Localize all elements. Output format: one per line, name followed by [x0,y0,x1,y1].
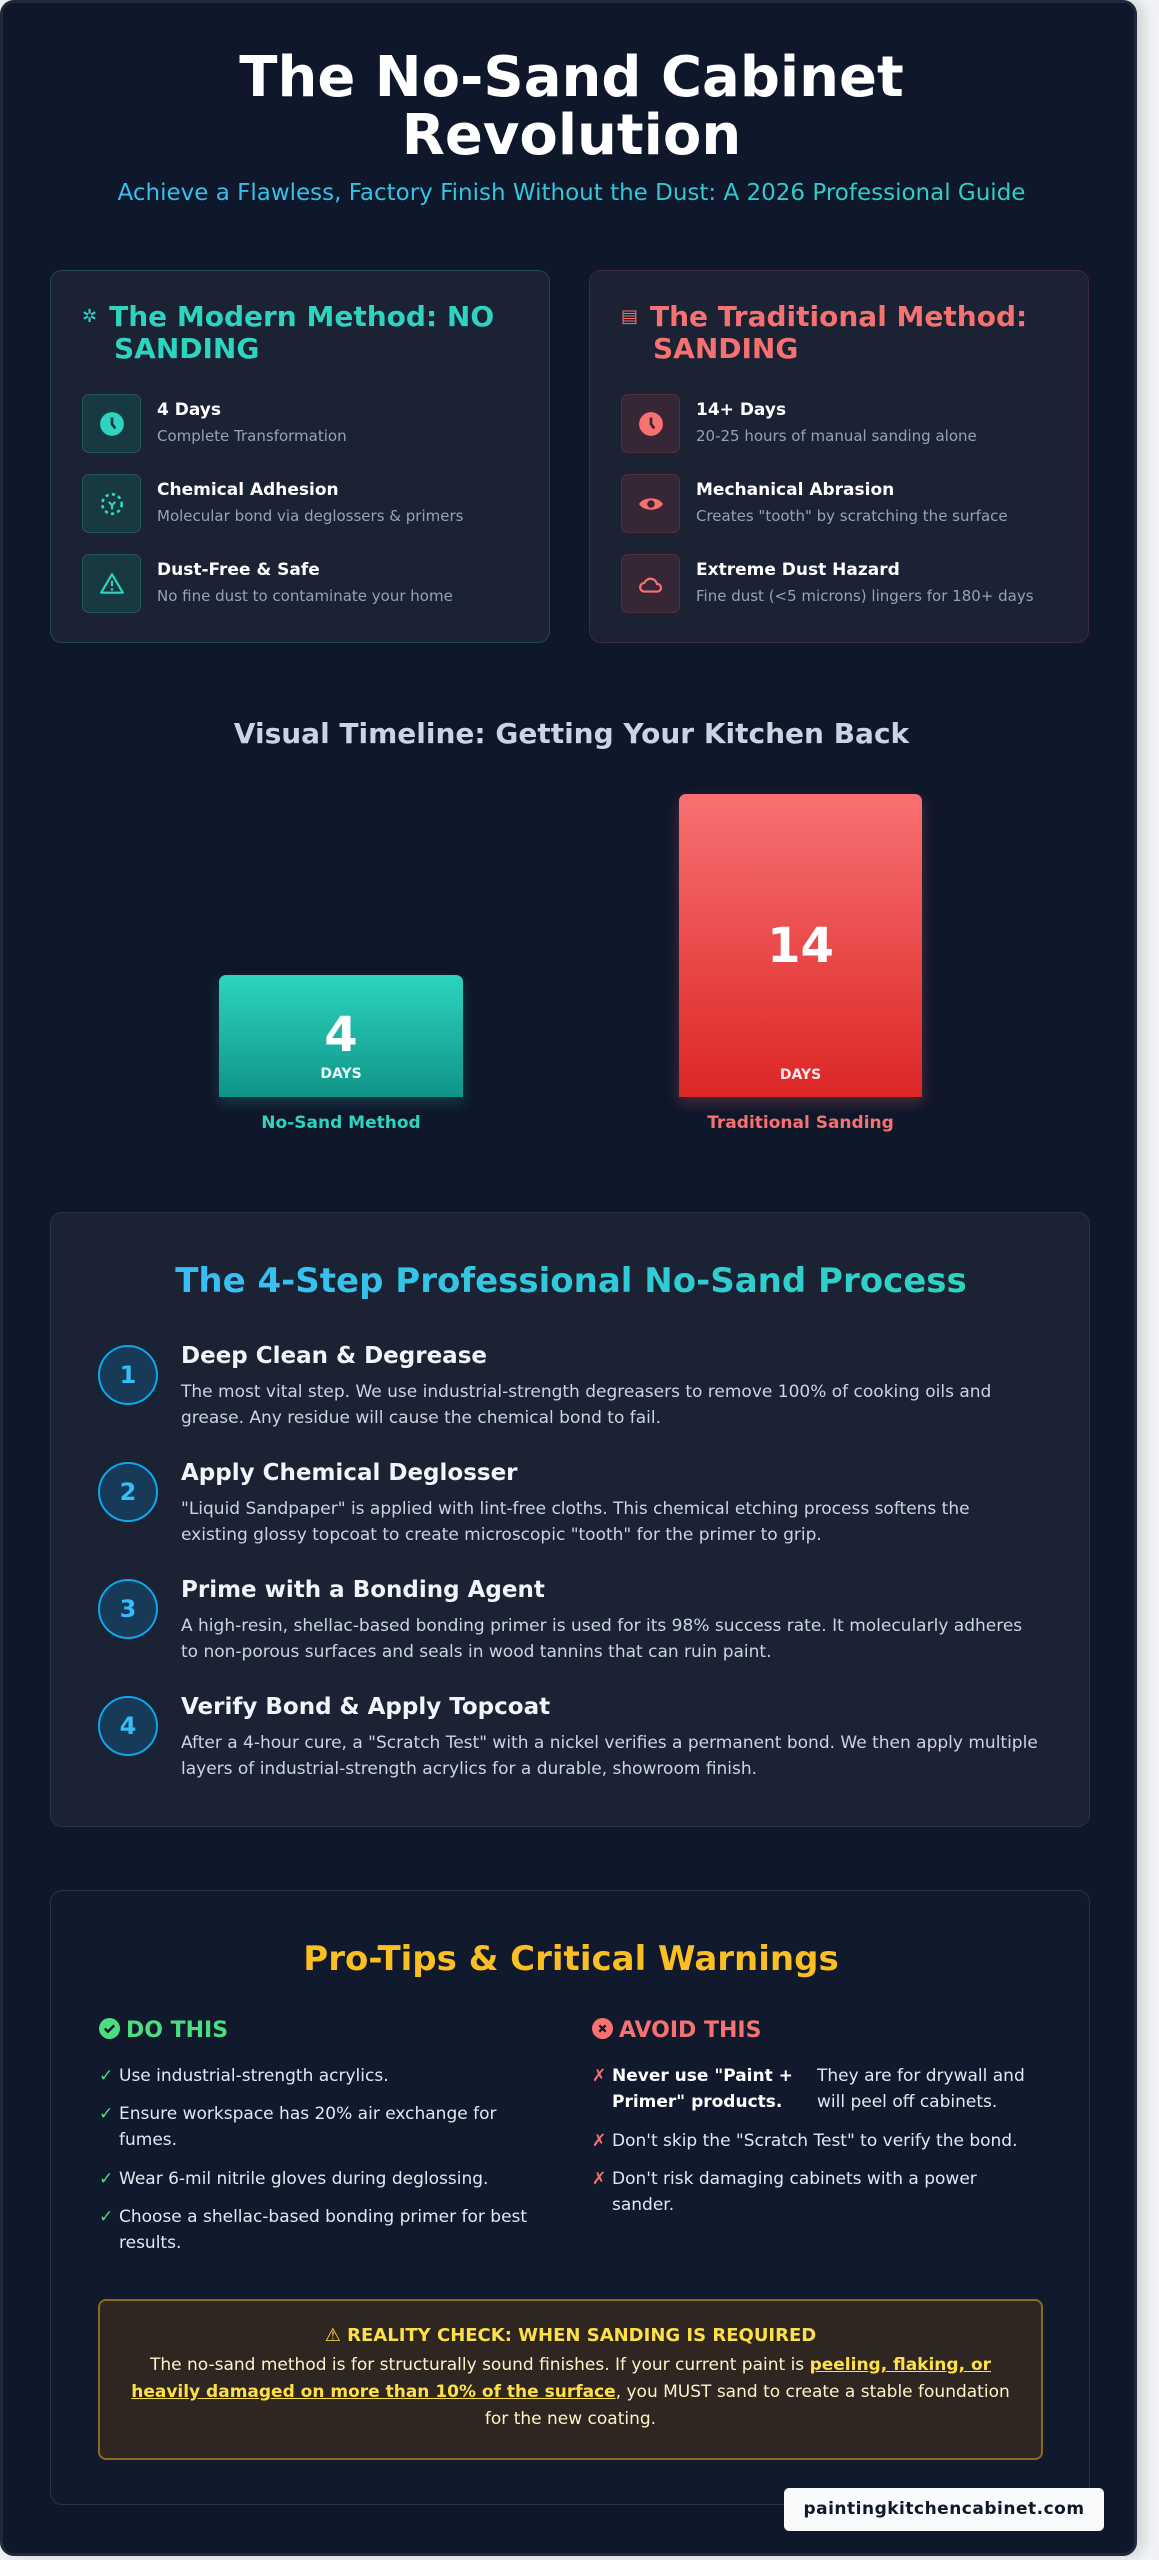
panel: 4-step process: The most vital step. We use industrial-strength degreasers to remove 100% of cooking oils and grease. Any residue will cause the chemical bond to fail. [181,1382,991,1428]
title: The No-Sand Cabinet [239,45,904,110]
bar: traditional 14 days [679,794,922,1097]
bar: traditional 14 days: DAYS [780,1067,821,1083]
step 4 [98,1694,1038,1779]
item: dust hazard: Extreme Dust Hazard [696,560,900,580]
panel heading: traditional: ▤ The Traditional Method: [621,300,1027,333]
avoid this column: They are for drywall and will peel off cabinets. [817,2066,1025,2112]
title: Revolution [402,103,741,168]
item: dust hazard [621,554,1034,613]
panel: pro-tips [50,1890,1090,2505]
avoid this column: Don't skip the "Scratch Test" to verify the bond. [612,2131,1018,2151]
panel: 4-step process: 3 [120,1595,136,1623]
panel: 4-step process: 1 [120,1361,136,1389]
item: mechanical abrasion: Creates "tooth" by scratching the surface [696,507,1008,525]
item: 4 days: Complete Transformation [157,427,347,445]
panel heading: traditional: SANDING [653,332,798,365]
avoid this column: ✗ [592,2131,606,2151]
do this column: Use industrial-strength acrylics. [119,2066,389,2086]
panel: 4-step process: A high-resin, shellac-based bonding primer is used for its 98% success rate. It molecularly adheres to non-porous surfaces and seals in wood tannins that can ruin paint. [181,1616,1022,1662]
panel heading: modern [82,300,494,365]
avoid heading: AVOID THIS [619,2018,761,2043]
do this column: ✓ [99,2169,113,2189]
label: traditional: Traditional Sanding [707,1113,894,1133]
item: dust free: Dust-Free & Safe [157,560,320,580]
item: chemical adhesion: Chemical Adhesion [157,480,339,500]
do this column [99,2018,527,2253]
item: mechanical abrasion [621,474,1008,533]
do heading: DO THIS [126,2018,228,2043]
panel: 4-step process: "Liquid Sandpaper" is applied with lint-free cloths. This chemical etching process softens the [181,1499,970,1519]
do this column: ✓ [99,2066,113,2086]
panel: 4-step process: Verify Bond & Apply Topcoat [181,1694,550,1720]
panel: 4-step process [50,1212,1090,1827]
do this column: ✓ [99,2207,113,2227]
do this column: Choose a shellac-based bonding primer for best results. [119,2207,527,2253]
step 2 [98,1460,970,1545]
bar: traditional 14 days: 14 [767,918,834,974]
avoid this column: Never use "Paint + Primer" products. [612,2066,793,2112]
panel heading: modern: ✲ The Modern Method: NO [82,300,494,333]
footer badge [784,2488,1104,2531]
avoid this column: ✗ [592,2066,606,2086]
bar: no-sand 4 days: 4 [324,1007,358,1063]
bar chart [214,793,929,1133]
do this column: Wear 6-mil nitrile gloves during deglossing. [119,2169,488,2189]
subtitle: Achieve a Flawless, Factory Finish Without the Dust: A 2026 Professional Guide [118,180,1025,206]
item: dust free: No fine dust to contaminate your home [157,587,453,605]
avoid this column: Don't risk damaging cabinets with a power sander. [612,2169,977,2215]
title [239,45,904,168]
panel: 4-step process: 2 [120,1478,136,1506]
callout: reality check: ⚠ REALITY CHECK: WHEN SANDING IS REQUIRED [325,2325,816,2346]
panel: 4-step process: After a 4-hour cure, a "Scratch Test" with a nickel verifies a permanent bond. We then apply multiple layers of industrial-strength acrylics for a durable, showroom finish. [181,1733,1038,1779]
panel: 4-step process: 4 [120,1712,136,1740]
panel: modern method [50,270,550,643]
panel heading: modern: SANDING [114,332,259,365]
label: no-sand: No-Sand Method [261,1113,421,1133]
callout: reality check: The no-sand method is for structurally sound finishes. If your current paint is peeling, flaking, or heavily damaged on more than 10% of the surface, you MUST sand to create a stable foundation for the new coating. [131,2355,1010,2429]
panel: 4-step process: Prime with a Bonding Agent [181,1577,545,1603]
panel: traditional method [589,270,1089,643]
timeline heading: Visual Timeline: Getting Your Kitchen Back [234,717,909,750]
tips heading: Pro-Tips & Critical Warnings [303,1939,839,1979]
footer badge: paintingkitchencabinet.com [803,2499,1085,2519]
bar: no-sand 4 days [219,975,463,1097]
item: 14 days: 14+ Days [696,400,786,420]
step 1 [98,1343,991,1428]
panel heading: traditional [621,300,1027,365]
bar: no-sand 4 days: DAYS [320,1066,362,1082]
panel: 4-step process: existing glossy topcoat to create microscopic "tooth" for the primer to grip. [181,1525,822,1545]
avoid this column: ✗ [592,2169,606,2189]
do this column: ✓ [99,2104,113,2124]
avoid this column [592,2018,1025,2215]
item: 4 days [82,394,347,453]
do this column: Ensure workspace has 20% air exchange for fumes. [119,2104,496,2150]
panel: 4-step process: Deep Clean & Degrease [181,1343,487,1369]
item: chemical adhesion: Molecular bond via deglossers & primers [157,507,463,525]
item: mechanical abrasion: Mechanical Abrasion [696,480,894,500]
step 3 [98,1577,1022,1662]
item: 4 days: 4 Days [157,400,221,420]
item: dust free [82,554,453,613]
panel: 4-step process: Apply Chemical Deglosser [181,1460,518,1486]
item: 14 days: 20-25 hours of manual sanding alone [696,427,977,445]
process heading: The 4-Step Professional No-Sand Process [175,1261,967,1301]
item: chemical adhesion [82,474,463,533]
item: 14 days [621,394,977,453]
callout: reality check [98,2299,1043,2460]
item: dust hazard: Fine dust (<5 microns) lingers for 180+ days [696,587,1034,605]
